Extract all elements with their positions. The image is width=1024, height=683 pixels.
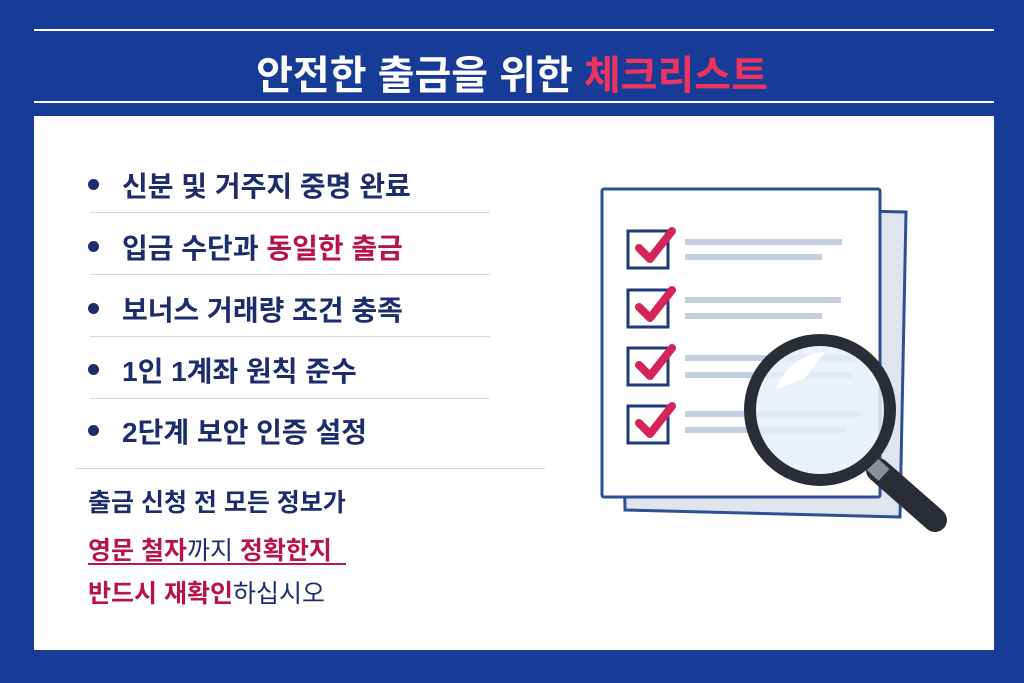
title: 안전한 출금을 위한 체크리스트	[256, 54, 768, 98]
item 2: 입금 수단과 동일한 출금	[122, 233, 403, 264]
panel: checklist	[34, 116, 994, 650]
item 5: 2단계 보안 인증 설정	[122, 417, 367, 448]
item 3: 보너스 거래량 조건 충족	[122, 295, 403, 326]
note text: 반드시 재확인하십시오	[88, 580, 325, 608]
note text: 영문 철자까지 정확한지	[88, 537, 332, 565]
note text	[88, 489, 346, 608]
item 1: 신분 및 거주지 중명 완료	[122, 171, 411, 202]
note text: 출금 신청 전 모든 정보가	[88, 489, 346, 517]
item 4: 1인 1계좌 원칙 준수	[122, 356, 357, 387]
